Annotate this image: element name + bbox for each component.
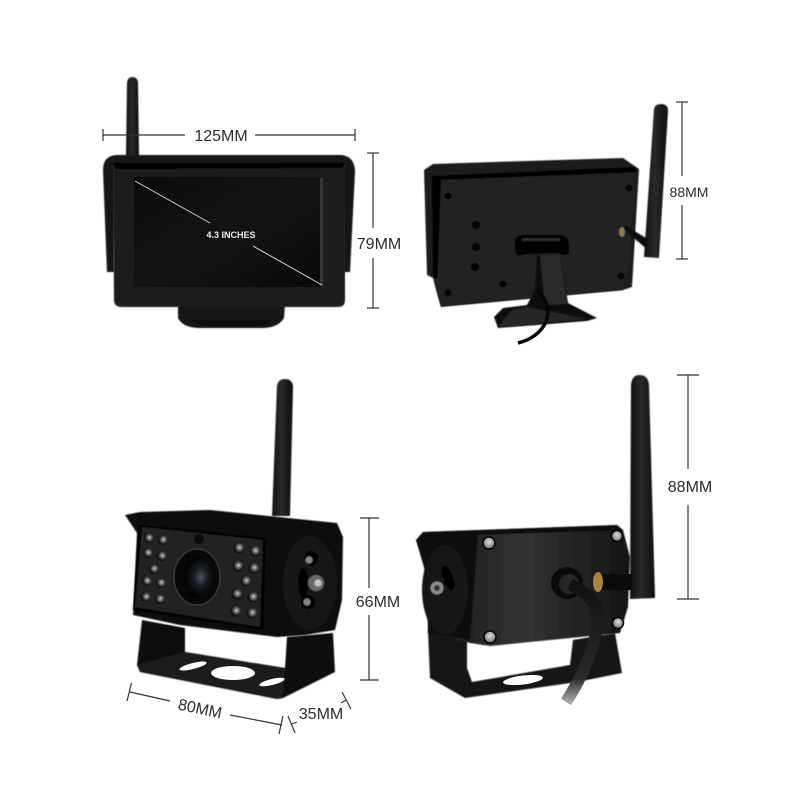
dimension: camera depth: 35MM [299,706,343,723]
icon: rear camera antenna [630,375,655,599]
icon: camera bracket [137,620,335,699]
icon: antenna connector [593,572,632,592]
dimension: monitor height: 79MM [357,236,401,253]
icon: rear camera cable [566,584,598,702]
icon: rear camera bracket [428,630,622,698]
dimension: camera height: 66MM [356,594,400,611]
icon: cable grommet [551,567,583,599]
icon: camera front panel [133,525,266,630]
dimension: rear antenna height: 88MM [668,479,712,496]
panel: camera front view [125,379,343,699]
icon: camera lens [174,549,220,605]
icon: infrared LEDs [141,533,260,618]
dimension: monitor width: 125MM [194,128,248,145]
dimension: camera width: 80MM [176,697,223,722]
icon: monitor sun visor [103,155,355,272]
icon: camera side plate [283,536,337,630]
icon: rear monitor stand [494,235,597,328]
icon: camera sensor dot [194,534,204,544]
label: screen size: 4.3 INCHES [206,230,256,240]
panel: monitor rear view [424,104,668,343]
icon: monitor antenna [126,77,139,156]
panel: monitor front view [103,77,355,328]
icon: rear monitor antenna [619,104,668,258]
icon: rear camera housing [416,525,630,646]
icon: monitor stand base [178,305,285,328]
icon: rear monitor housing [424,158,639,307]
icon: bracket slots [179,660,285,688]
monitor screen [134,177,323,287]
icon: rear camera screws [483,530,624,643]
dimension: camera width [127,683,283,734]
icon: camera antenna [272,379,293,516]
icon: camera housing [125,510,343,637]
screen diagonal line [135,181,322,285]
dimension: camera depth [288,692,351,733]
icon: monitor bezel [113,163,345,307]
dimension: monitor antenna height: 88MM [670,184,708,200]
icon: rear monitor plate [437,173,636,306]
icon: rear camera side plate [422,545,468,635]
icon: rear screw holes [444,184,632,296]
panel: camera rear view [416,375,655,702]
icon: rear monitor cable [518,290,548,343]
icon: rear bracket slots [503,673,543,687]
